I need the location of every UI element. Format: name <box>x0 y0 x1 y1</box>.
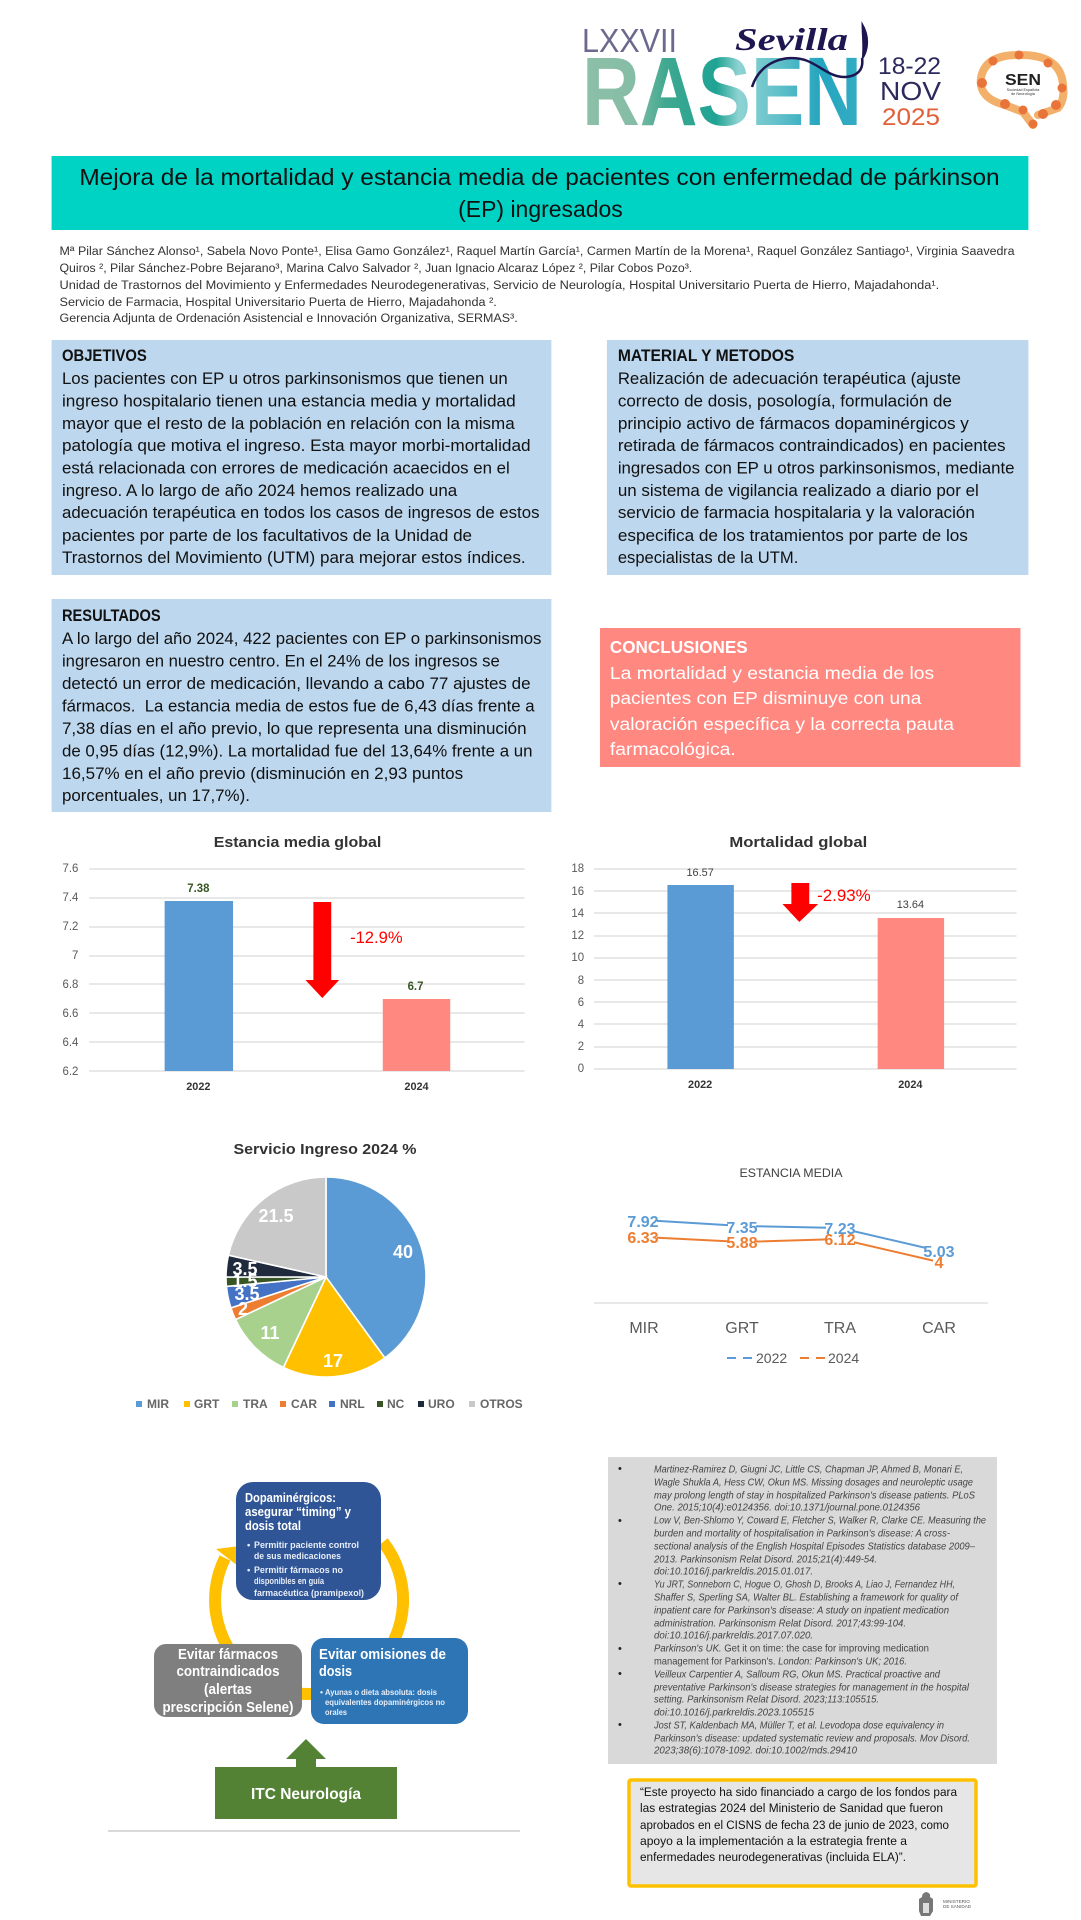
pie legend: NRL <box>340 1397 365 1411</box>
panel: references: 2023;38(6):1078-1092. doi:10.1002/mds.29410 <box>653 1744 857 1756</box>
line chart: estancia media: MIR <box>629 1320 659 1337</box>
box: evitar fármacos contraindicados <box>154 1644 302 1717</box>
congress dates: NOV <box>880 76 942 106</box>
pie chart: servicio ingreso: 3.5 <box>234 1284 260 1304</box>
panel: funding statement: las estrategias 2024 del Ministerio de Sanidad que fueron <box>640 1801 943 1815</box>
line chart: estancia media: 5.03 <box>923 1244 955 1261</box>
SEN logo: Sociedad Española <box>1007 88 1040 92</box>
panel: resultados: de 0,95 días (12,9%). La mortalidad fue del 13,64% frente a un <box>62 741 533 761</box>
box: dopaminérgicos: dosis total <box>245 1519 301 1533</box>
bar chart: mortalidad global: 8 <box>578 975 584 987</box>
pie legend: TRA <box>243 1397 268 1411</box>
panel: material y metodos: Realización de adecuación terapéutica (ajuste <box>618 369 961 388</box>
pie chart: servicio ingreso: Servicio Ingreso 2024 % <box>234 1142 417 1158</box>
pie legend: GRT <box>194 1397 220 1411</box>
box: dopaminérgicos <box>236 1482 381 1600</box>
arrow: green up <box>286 1739 326 1768</box>
box: dopaminérgicos: Permitir fármacos no <box>254 1565 343 1576</box>
pie legend <box>136 1397 523 1411</box>
bar chart: mortalidad global: 12 <box>571 930 584 942</box>
pie chart: servicio ingreso: 40 <box>393 1242 413 1262</box>
bar chart: estancia media global: 7.38 <box>187 883 210 895</box>
icon: ministerio de sanidad logo: MINISTERIO <box>943 1899 970 1904</box>
panel: references: Shaffer S, Sperling SA, Walter BL. Establishing a framework for quality of <box>654 1592 959 1604</box>
bar chart: mortalidad global: 10 <box>571 952 584 964</box>
panel: material y metodos: un sistema de vigilancia realizado a diario por el <box>618 481 979 500</box>
pie chart: servicio ingreso <box>136 1142 523 1411</box>
box: dopaminérgicos: Dopaminérgicos: <box>245 1491 336 1505</box>
icon: yellow circular arrow <box>215 1542 403 1694</box>
authors and affiliations: Gerencia Adjunta de Ordenación Asistencial e Innovación Organizativa, SERMAS³. <box>60 311 518 325</box>
box: ITC Neurología <box>215 1767 397 1819</box>
panel: resultados: porcentuales, un 17,7%). <box>62 786 250 805</box>
box: dopaminérgicos: • <box>247 1565 251 1576</box>
title banner: Mejora de la mortalidad y estancia media de pacientes con enfermedad de párkinson <box>79 164 1000 190</box>
bar chart: estancia media global: 6.6 <box>63 1008 78 1020</box>
box: dopaminérgicos: de sus medicaciones <box>254 1551 341 1562</box>
panel: material y metodos: especialistas de la UTM. <box>618 548 798 567</box>
panel: references: doi:10.1016/j.parkreldis.2017.07.020. <box>654 1629 813 1641</box>
line chart: estancia media: 4 <box>935 1255 944 1272</box>
panel: funding statement: enfermedades neurodegenerativas (incluida ELA)”. <box>640 1850 906 1864</box>
authors and affiliations: Mª Pilar Sánchez Alonso¹, Sabela Novo Ponte¹, Elisa Gamo González¹, Raquel Martín García¹, Carmen Martín de la Morena¹, Raquel González Santiago¹, Virginia Saavedra <box>60 244 1015 258</box>
congress logo: LXXVII RASEN Sevilla: Sevilla <box>735 21 848 57</box>
bar chart: estancia media global: 2024 <box>404 1081 430 1093</box>
panel: references: Jost ST, Kaldenbach MA, Müller T, et al. Levodopa dose equivalency in <box>653 1719 944 1731</box>
panel: objetivos: Trastornos del Movimiento (UTM) para mejorar estos índices. <box>62 548 526 567</box>
line chart: estancia media: CAR <box>922 1320 956 1337</box>
panel: resultados: fármacos. La estancia media de estos fue de 6,43 días frente a <box>62 696 535 716</box>
panel: references: may prolong length of stay in hospitalized Parkinson's disease patients. PLoS <box>654 1489 975 1501</box>
bar chart: mortalidad global: 2 <box>578 1041 584 1053</box>
authors and affiliations: Quiros ², Pilar Sánchez-Pobre Bejarano³, Marina Calvo Salvador ², Juan Ignacio Alcaraz López ², Pilar Cobos Pozo³. <box>60 261 692 275</box>
panel: references: Yu JRT, Sonneborn C, Hogue O, Ghosh D, Brooks A, Liao J, Fernandez HH, <box>654 1578 955 1590</box>
panel: references: sectional analysis of the English Hospital Episodes Statistics database 2009– <box>654 1541 975 1553</box>
box: dopaminérgicos: farmacéutica (pramipexol) <box>254 1588 364 1599</box>
panel: resultados: 7,38 días en el año previo, lo que representa una disminución <box>62 719 527 738</box>
panel: references: • <box>618 1668 622 1680</box>
panel: resultados: 16,57% en el año previo (disminución en 2,93 puntos <box>62 764 463 783</box>
bar chart: estancia media global: 7 <box>72 950 78 962</box>
title banner: (EP) ingresados <box>458 196 623 222</box>
panel: objetivos <box>52 340 551 575</box>
line chart: estancia media: ESTANCIA MEDIA <box>740 1166 842 1180</box>
SEN logo <box>977 50 1066 128</box>
panel: references: Parkinson's disease: updated systematic review and proposals. Mov Disord. <box>654 1732 970 1744</box>
icon: ministerio de sanidad logo: DE SANIDAD <box>943 1904 972 1909</box>
line chart: estancia media: 6.12 <box>824 1232 856 1249</box>
panel: objetivos: ingreso. A lo largo de año 2024 hemos realizado una <box>62 481 458 500</box>
panel: resultados <box>52 599 551 812</box>
line chart: estancia media: 7.23 <box>824 1221 856 1238</box>
bar chart: estancia media global: 6.7 <box>408 981 423 993</box>
box: evitar omisiones de dosis: Evitar omisiones de <box>319 1647 446 1663</box>
panel: conclusiones: La mortalidad y estancia media de los <box>610 663 934 683</box>
panel: conclusiones: farmacológica. <box>610 739 736 759</box>
panel: material y metodos: servicio de farmacia hospitalaria y la valoración <box>618 503 975 522</box>
box: evitar omisiones de dosis: • <box>320 1687 323 1697</box>
panel: references: doi:10.1016/j.parkreldis.2015.01.017. <box>654 1565 813 1577</box>
panel: funding statement: aprobados en el CISNS de fecha 23 de junio de 2023, como <box>640 1818 949 1832</box>
panel: references: • <box>618 1643 622 1655</box>
box: evitar fármacos contraindicados: contraindicados <box>176 1664 280 1680</box>
SEN logo: de Neurología <box>1011 92 1036 96</box>
bar chart: mortalidad global: 14 <box>571 908 585 920</box>
bar chart: estancia media global <box>63 835 525 1093</box>
bar chart: estancia media global: Estancia media global <box>214 835 381 851</box>
title banner <box>52 156 1028 230</box>
panel: resultados: A lo largo del año 2024, 422 pacientes con EP o parkinsonismos <box>62 629 541 648</box>
authors and affiliations: Unidad de Trastornos del Movimiento y Enfermedades Neurodegenerativas, Servicio de Neurología, Hospital Universitario Puerta de Hierro, Majadahonda¹. <box>60 278 939 292</box>
panel: objetivos: está relacionada con errores de medicación acaecidos en el <box>62 458 510 478</box>
icon: ministerio de sanidad logo <box>919 1892 972 1916</box>
box: dopaminérgicos: Permitir paciente control <box>254 1540 359 1551</box>
pie legend: NC <box>387 1397 405 1411</box>
pie legend: URO <box>428 1397 455 1411</box>
authors and affiliations <box>60 244 1015 325</box>
panel: conclusiones <box>600 628 1020 767</box>
pie legend: OTROS <box>480 1397 523 1411</box>
bar chart: estancia media global: 7.6 <box>63 863 78 875</box>
panel: references: • <box>618 1463 622 1475</box>
box: evitar fármacos contraindicados: (alertas <box>204 1682 252 1698</box>
panel: references: doi:10.1016/j.parkreldis.2023.105515 <box>654 1706 814 1718</box>
panel: material y metodos: MATERIAL Y METODOS <box>618 346 794 365</box>
pie chart: servicio ingreso: 17 <box>323 1351 343 1371</box>
pie chart: servicio ingreso: 21.5 <box>258 1206 294 1226</box>
panel: conclusiones: pacientes con EP disminuye con una <box>610 688 921 708</box>
panel: references <box>608 1457 997 1764</box>
panel: material y metodos: retirada de fármacos contraindicados) en pacientes <box>618 436 1006 455</box>
bar chart: mortalidad global: 16 <box>571 886 584 898</box>
panel: references: • <box>618 1719 622 1731</box>
line chart: estancia media: TRA <box>824 1320 856 1337</box>
bar chart: mortalidad global: 6 <box>578 997 584 1009</box>
panel: objetivos: ingreso hospitalario tienen una estancia media y mortalidad <box>62 391 516 410</box>
panel: material y metodos: especifica de los tratamientos por parte de los <box>618 526 968 545</box>
panel: references: setting. Parkinsonism Relat Disord. 2023;113:105515. <box>654 1694 879 1706</box>
panel: references: Veilleux Carpentier A, Salloum RG, Okun MS. Practical proactive and <box>654 1668 941 1680</box>
panel: references: Low V, Ben-Shlomo Y, Coward E, Fletcher S, Walker R, Clarke CE. Measuring the <box>654 1515 986 1527</box>
panel: objetivos: patología que motiva el ingreso. Esta mayor morbi-mortalidad <box>62 436 531 455</box>
box: evitar omisiones de dosis: Ayunas o dieta absoluta: dosis <box>325 1687 437 1697</box>
bar chart: estancia media global: 7.4 <box>63 892 79 904</box>
bar chart: estancia media global: 6.2 <box>63 1066 78 1078</box>
bar chart: mortalidad global: 2024 <box>898 1079 923 1091</box>
line chart: estancia media: 5.88 <box>726 1235 758 1252</box>
panel: funding statement: “Este proyecto ha sido financiado a cargo de los fondos para <box>640 1785 957 1799</box>
panel: objetivos: Los pacientes con EP u otros parkinsonismos que tienen un <box>62 369 508 388</box>
box: evitar omisiones de dosis: equivalentes dopaminérgicos no <box>325 1697 445 1707</box>
bar chart: mortalidad global: 0 <box>578 1063 584 1075</box>
panel: material y metodos <box>607 340 1028 575</box>
panel: objetivos: mayor que el resto de la población en relación con la misma <box>62 414 515 433</box>
congress logo: LXXVII RASEN Sevilla: RASEN <box>582 37 862 146</box>
panel: funding statement <box>629 1780 976 1886</box>
line chart: estancia media <box>594 1166 988 1366</box>
congress dates: 2025 <box>882 104 940 131</box>
box: evitar omisiones de dosis <box>311 1638 468 1724</box>
line chart legend: 2022 <box>756 1350 787 1366</box>
line chart legend: 2024 <box>828 1350 859 1366</box>
bar chart: estancia media global: -12.9% <box>350 929 403 947</box>
bar chart: mortalidad global: 13.64 <box>897 899 924 911</box>
box: ITC Neurología: ITC Neurología <box>251 1786 361 1803</box>
panel: conclusiones: CONCLUSIONES <box>610 637 748 657</box>
panel: references: administration. Parkinsonism Relat Disord. 2017;43:99-104. <box>654 1618 906 1630</box>
pie chart: servicio ingreso: 11 <box>260 1323 280 1343</box>
congress dates <box>878 53 942 131</box>
pie legend: CAR <box>291 1397 317 1411</box>
line chart: estancia media: GRT <box>725 1320 759 1337</box>
bar chart: mortalidad global: -2.93% <box>817 887 871 905</box>
panel: references: inpatient care for Parkinson's disease: A study on inpatient medication <box>654 1605 949 1617</box>
box: dopaminérgicos: • <box>247 1540 251 1551</box>
panel: references: One. 2015;10(4):e0124356. doi:10.1371/journal.pone.0124356 <box>654 1502 920 1514</box>
bar chart: mortalidad global: 16.57 <box>687 867 714 879</box>
panel: objetivos: adecuación terapéutica en todos los casos de ingresos de estos <box>62 503 539 522</box>
pie chart: servicio ingreso: 1.5 <box>232 1271 258 1291</box>
congress logo: LXXVII RASEN Sevilla: LXXVII <box>582 22 677 59</box>
pie chart: servicio ingreso: 3.5 <box>232 1259 258 1279</box>
bar chart: estancia media global: 7.2 <box>63 921 78 933</box>
authors and affiliations: Servicio de Farmacia, Hospital Universitario Puerta de Hierro, Majadahonda ². <box>60 295 497 309</box>
pie chart: servicio ingreso: 2 <box>238 1299 248 1319</box>
panel: resultados: RESULTADOS <box>62 606 161 625</box>
bar chart: mortalidad global: 2022 <box>688 1079 712 1091</box>
panel: references: Wagle Shukla A, Hess CW, Okun MS. Missing dosages and neuroleptic usage <box>654 1477 973 1489</box>
panel: references: 2013. Parkinsonism Relat Disord. 2015;21(4):449-54. <box>653 1553 877 1565</box>
pie legend: MIR <box>147 1397 169 1411</box>
panel: material y metodos: ingresados con EP u otros parkinsonismos, mediante <box>618 458 1015 478</box>
panel: material y metodos: principio activo de fármacos dopaminérgicos y <box>618 414 969 433</box>
panel: resultados: ingresaron en nuestro centro. En el 24% de los ingresos se <box>62 651 500 671</box>
panel: conclusiones: valoración específica y la correcta pauta <box>610 714 954 734</box>
panel: references: preventative Parkinson's disease strategies for management in the hospital <box>653 1681 970 1693</box>
panel: references: • <box>618 1515 622 1527</box>
box: evitar fármacos contraindicados: prescripción Selene) <box>162 1700 294 1716</box>
panel: resultados: detectó un error de medicación, llevando a cabo 77 ajustes de <box>62 674 531 693</box>
panel: material y metodos: correcto de dosis, posología, formulación de <box>618 391 952 410</box>
panel: references: • <box>618 1578 622 1590</box>
box: dopaminérgicos: disponibles en guía <box>254 1576 325 1587</box>
panel: objetivos: pacientes por parte de los facultativos de la Unidad de <box>62 526 472 545</box>
box: dopaminérgicos: asegurar “timing” y <box>245 1505 351 1519</box>
bar chart: mortalidad global: 18 <box>571 863 584 875</box>
panel: references: Martinez-Ramirez D, Giugni JC, Little CS, Chapman JP, Ahmed B, Monari E, <box>654 1463 963 1475</box>
panel: funding statement: apoyo a la implementación a la estrategia frente a <box>640 1834 907 1848</box>
panel: objetivos: OBJETIVOS <box>62 346 147 365</box>
SEN logo: SEN <box>1005 72 1041 89</box>
bar chart: mortalidad global: Mortalidad global <box>729 835 867 851</box>
diagram: therapeutic adequation cycle <box>154 1482 468 1819</box>
bar chart: mortalidad global <box>571 835 1016 1091</box>
box: evitar omisiones de dosis: orales <box>325 1707 347 1717</box>
line chart: estancia media: 7.35 <box>726 1220 758 1237</box>
panel: references: Parkinson's UK. Get it on time: the case for improving medication <box>654 1643 929 1655</box>
box: evitar omisiones de dosis: dosis <box>319 1664 352 1680</box>
bar chart: estancia media global: 6.4 <box>63 1037 79 1049</box>
bar chart: mortalidad global: 4 <box>578 1019 585 1031</box>
box: evitar fármacos contraindicados: Evitar fármacos <box>178 1647 278 1663</box>
bar chart: estancia media global: 2022 <box>186 1081 210 1093</box>
line chart legend <box>727 1350 859 1366</box>
congress dates: 18-22 <box>878 53 941 80</box>
panel: references: burden and mortality of hospitalisation in Parkinson's disease: A cross- <box>654 1527 950 1539</box>
line chart: estancia media: 6.33 <box>627 1230 659 1247</box>
bar chart: estancia media global: 6.8 <box>63 979 78 991</box>
panel: references: management for Parkinson's. London: Parkinson's UK; 2016. <box>654 1656 907 1668</box>
line chart: estancia media: 7.92 <box>627 1214 659 1231</box>
